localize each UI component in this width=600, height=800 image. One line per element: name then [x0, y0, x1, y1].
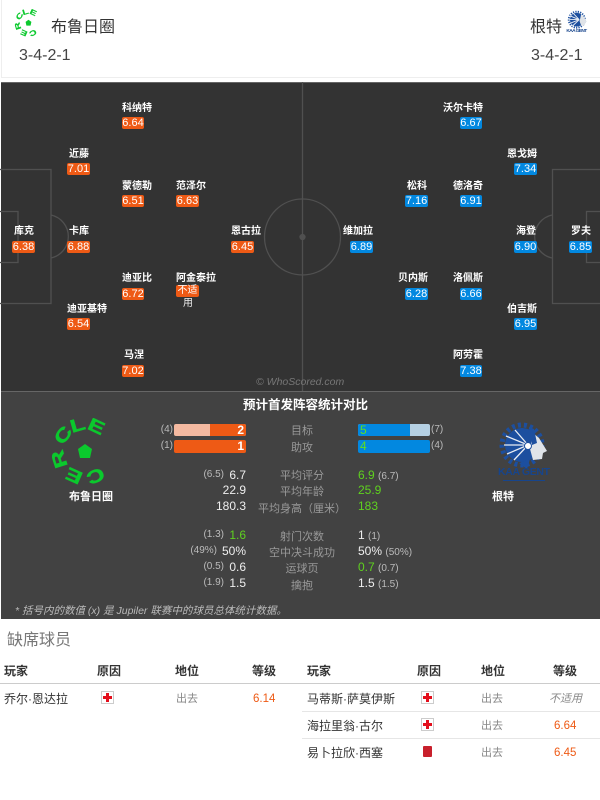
player: 蒙德勒: 蒙德勒: [122, 181, 152, 192]
table header: 玩家: 玩家: [307, 664, 331, 678]
table: home absentees: [4, 664, 276, 706]
icon: Cercle Brugge crest: C: [83, 463, 107, 488]
bar parenthetical: assists home: (1): [161, 440, 173, 451]
player: 罗夫: 罗夫: [571, 226, 591, 237]
bar: goals away: [358, 424, 430, 436]
panel: lineup stats comparison: [1, 391, 600, 619]
away team label: 根特: [492, 491, 514, 503]
home stat: dribbles: 0.6: [229, 560, 246, 574]
bar: assists away: 4: [360, 439, 367, 453]
player: 沃尔卡特: 6.67: [460, 117, 482, 129]
table header: 原因: 原因: [417, 664, 441, 678]
icon: red card: [423, 746, 432, 757]
player: 阿金泰拉: 阿金泰拉: [176, 273, 216, 284]
player: 罗夫: [569, 225, 592, 253]
home stat: tackles overall: (1.9): [203, 577, 224, 588]
player: 范泽尔: 6.63: [177, 195, 198, 207]
table header: 等级: 等级: [252, 664, 276, 678]
player: 马涅: [122, 349, 144, 377]
icon: injury: [101, 691, 114, 704]
rating n/a: 不适用: [549, 693, 582, 705]
player: 近藤: 7.01: [68, 163, 89, 175]
rating: 6.45: [554, 747, 576, 759]
player: 德洛奇: 6.91: [460, 195, 482, 207]
table header: 地位: 地位: [175, 664, 199, 678]
away formation: 3-4-2-1: [531, 47, 583, 64]
icon: Cercle Brugge small crest: C: [14, 10, 25, 21]
player: 恩戈姆: 7.34: [515, 163, 536, 175]
player: 海登: [514, 225, 537, 253]
player: 海登: 海登: [516, 226, 536, 237]
stat label: 空中决斗成功: 空中决斗成功: [269, 547, 335, 559]
heading: absent players: 缺席球员: [7, 632, 71, 649]
icon: KAA Gent small crest: [566, 10, 588, 34]
player: 阿劳霍: [453, 349, 483, 377]
player: 维加拉: 维加拉: [343, 226, 373, 237]
icon: Cercle Brugge crest: E: [63, 463, 86, 488]
icon: Cercle Brugge small crest: E: [19, 28, 29, 38]
player: 迪亚基特: [67, 303, 107, 330]
home stat: dribbles overall: (0.5): [203, 561, 224, 572]
row: 马蒂斯·萨莫伊斯: 马蒂斯·萨莫伊斯: [307, 692, 395, 706]
bar: assists home: 1: [237, 439, 244, 453]
player: 蒙德勒: 6.51: [122, 195, 144, 207]
player: 马涅: 马涅: [124, 350, 144, 361]
bar parenthetical: goals home: (4): [161, 424, 173, 435]
player: 阿金泰拉: 不适: [178, 285, 198, 296]
icon: Cercle Brugge small crest: [14, 9, 38, 38]
player: 科纳特: 科纳特: [122, 103, 152, 114]
player: 近藤: [67, 148, 90, 175]
player: 恩古拉: 恩古拉: [231, 226, 261, 237]
player: 伯吉斯: 6.95: [515, 318, 536, 330]
player: 马涅: 7.02: [122, 365, 144, 377]
bar parenthetical: assists away: (4): [431, 440, 443, 451]
stat label: 助攻: 助攻: [291, 442, 313, 454]
bar: assists home: [174, 440, 246, 453]
stats heading: 预计首发阵容统计对比: [243, 398, 368, 412]
player: 蒙德勒: [122, 180, 152, 207]
player: 洛佩斯: 6.66: [460, 288, 482, 300]
table header: 等级: 等级: [553, 664, 577, 678]
player: 伯吉斯: [507, 303, 537, 330]
player: 范泽尔: [176, 180, 206, 207]
player: 贝内斯: 6.28: [406, 288, 427, 300]
home team label: 布鲁日圈: [69, 491, 113, 503]
stat label: 射门次数: 射门次数: [280, 531, 324, 543]
player: 维加拉: [343, 224, 373, 253]
footnote: * 括号内的数值 (x) 是 Jupiler 联赛中的球员总体统计数据。: [15, 605, 287, 617]
stat label: 擒抱: 擒抱: [291, 580, 313, 592]
stat label: 平均身高: 平均身高（厘米）: [258, 503, 346, 515]
player: 贝内斯: 贝内斯: [398, 273, 428, 284]
away stat: rating: 6.9 (6.7): [358, 468, 399, 482]
player: 松科: [405, 180, 428, 207]
player: 库克: 库克: [14, 226, 34, 237]
home stat: rating overall: (6.5): [203, 469, 224, 480]
away stat: shots: 1 (1): [358, 528, 380, 542]
icon: injury: [421, 691, 434, 704]
player: 恩戈姆: [507, 148, 537, 175]
player: 科纳特: [122, 102, 152, 129]
icon: Cercle Brugge crest: C: [50, 422, 77, 448]
home stat: tackles: 1.5: [229, 576, 246, 590]
player: 德洛奇: [453, 180, 483, 207]
home formation: 3-4-2-1: [19, 47, 71, 64]
icon: KAA Gent crest: [498, 422, 551, 481]
table header: 原因: 原因: [97, 664, 121, 678]
stat label: 平均评分: 平均评分: [280, 470, 324, 482]
player: 德洛奇: 德洛奇: [453, 181, 483, 192]
table header: 玩家: 玩家: [4, 664, 28, 678]
player: 阿劳霍: 7.38: [460, 365, 482, 377]
player: 沃尔卡特: 沃尔卡特: [443, 103, 483, 114]
player: 迪亚基特: 迪亚基特: [67, 304, 107, 315]
rating: 6.64: [554, 720, 576, 732]
player: 洛佩斯: 洛佩斯: [453, 273, 483, 284]
player: 阿劳霍: 阿劳霍: [453, 350, 483, 361]
player: 沃尔卡特: [443, 102, 483, 129]
player: 科纳特: 6.64: [122, 117, 144, 129]
home stat: rating: 6.7: [229, 468, 246, 482]
player: 迪亚基特: 6.54: [68, 318, 89, 330]
table header rule: [0, 683, 600, 684]
row: 海拉里翁·古尔: 海拉里翁·古尔: [307, 719, 383, 733]
home stat: age: 22.9: [223, 483, 246, 497]
player: 卡库: 6.88: [68, 241, 89, 253]
player: 库克: [12, 225, 35, 253]
icon: Cercle Brugge small crest: C: [27, 28, 38, 38]
player: 恩古拉: [231, 224, 261, 253]
home stat: shots overall: (1.3): [203, 529, 224, 540]
player: 恩戈姆: 恩戈姆: [507, 149, 537, 160]
rating: 6.14: [253, 693, 275, 705]
divider: [302, 738, 600, 739]
player: 海登: 6.90: [515, 241, 536, 253]
away stat: height: 183: [358, 499, 378, 513]
watermark: © WhoScored.com: [256, 376, 344, 388]
away team name: 根特: [530, 19, 562, 36]
player: 卡库: [67, 225, 90, 253]
away stat: age: 25.9: [358, 483, 381, 497]
player: 迪亚比: [122, 272, 152, 300]
player: 近藤: 近藤: [69, 149, 89, 160]
home stat: height: 180.3: [216, 499, 246, 513]
stat label: 运球页: 运球页: [286, 563, 318, 575]
player: 伯吉斯: 伯吉斯: [507, 304, 537, 315]
player: 洛佩斯: [453, 272, 483, 300]
away stat: dribbles: 0.7 (0.7): [358, 560, 399, 574]
table header: 地位: 地位: [481, 664, 505, 678]
player: 迪亚比: 迪亚比: [122, 273, 152, 284]
icon: KAA Gent crest: KAA GENT: [498, 466, 551, 478]
stat label: 平均年龄: 平均年龄: [280, 486, 324, 498]
divider: [302, 711, 600, 712]
player: 范泽尔: 范泽尔: [176, 181, 206, 192]
player: 罗夫: 6.85: [570, 241, 591, 253]
status: 出去: [481, 720, 503, 732]
player: 松科: 7.16: [406, 195, 427, 207]
home stat: aerials overall: (49%): [190, 545, 217, 556]
bar parenthetical: goals away: (7): [431, 424, 443, 435]
away stat: tackles: 1.5 (1.5): [358, 576, 399, 590]
pitch markings: [0, 82, 600, 391]
header: match teams and formations: [1, 0, 600, 78]
status: 出去: [481, 693, 503, 705]
player: 恩古拉: 6.45: [232, 241, 253, 253]
stat label: 目标: 目标: [291, 425, 313, 437]
player: 卡库: 卡库: [69, 226, 89, 237]
player: 阿金泰拉: 用: [183, 298, 193, 309]
away stat: aerials: 50% (50%): [358, 544, 412, 558]
bar: goals home: [174, 424, 246, 436]
icon: injury: [421, 718, 434, 731]
player: 库克: 6.38: [13, 241, 34, 253]
status: 出去: [481, 747, 503, 759]
bar: assists away: [358, 440, 430, 453]
home stat: aerials: 50%: [222, 544, 246, 558]
home team name: 布鲁日圈: [51, 19, 115, 36]
icon: Cercle Brugge crest: [50, 418, 108, 488]
row: 易卜拉欣·西塞: 易卜拉欣·西塞: [307, 746, 383, 760]
panel: pitch: [1, 82, 600, 391]
icon: KAA Gent small crest: KAA GENT: [566, 28, 587, 34]
player: 阿金泰拉: [176, 272, 216, 309]
player: 松科: 松科: [407, 181, 427, 192]
home stat: shots: 1.6: [229, 528, 246, 542]
player: 贝内斯: [398, 272, 428, 300]
table: away absentees: [302, 664, 600, 760]
status: 出去: [176, 693, 198, 705]
player: 迪亚比: 6.72: [122, 288, 144, 300]
player: 维加拉: 6.89: [351, 241, 372, 253]
row: 乔尔·恩达拉: 乔尔·恩达拉: [4, 692, 68, 706]
